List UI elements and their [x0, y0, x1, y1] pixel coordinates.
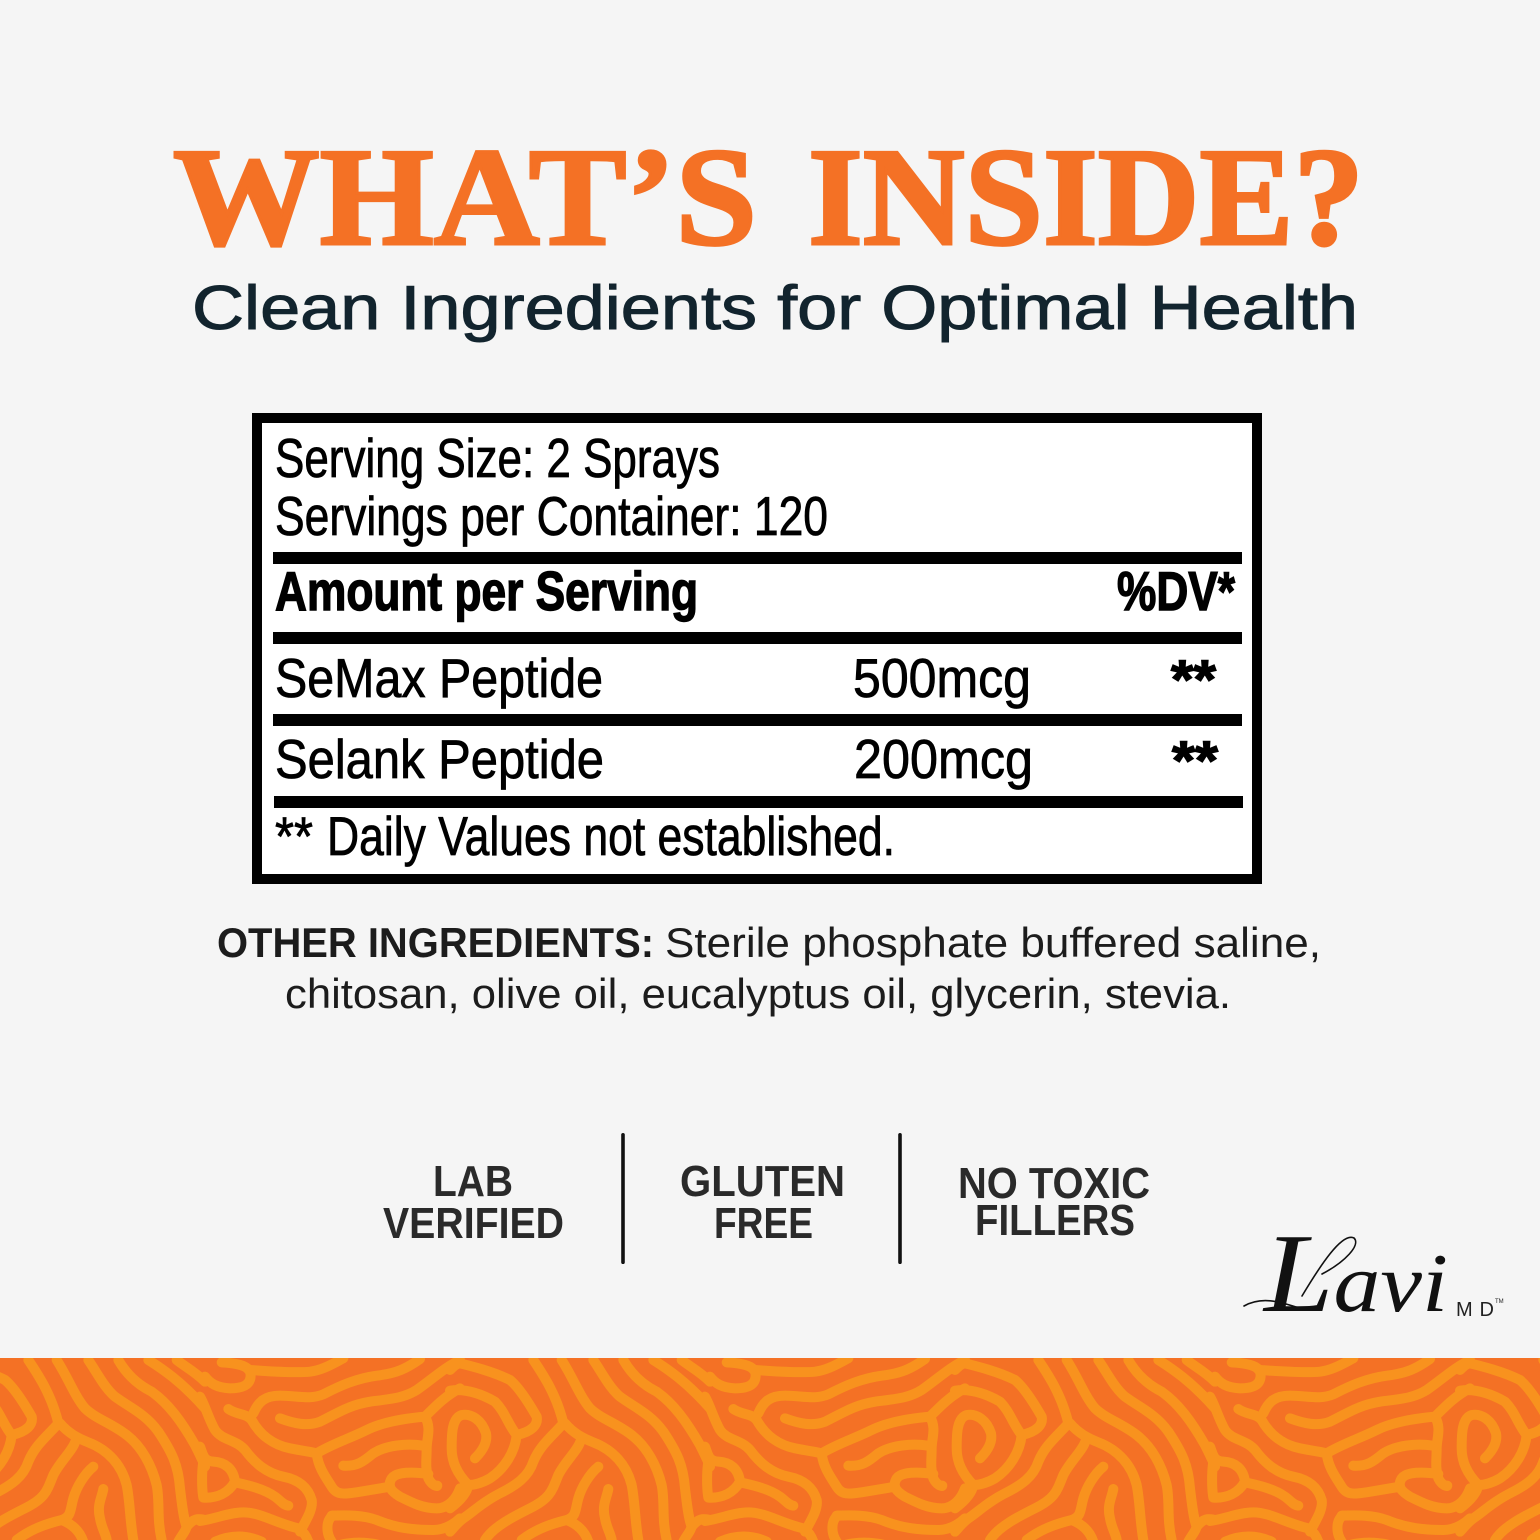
title: INSIDE? — [808, 120, 1364, 275]
row: Selank — [275, 728, 1219, 791]
badge: lab verified: VERIFIED — [383, 1199, 564, 1248]
logo: Lavi MD: TM — [1495, 1299, 1504, 1305]
amount per serving header: Amount per Serving — [275, 560, 698, 622]
badge: no toxic fillers — [958, 1159, 1150, 1245]
panel: supplement facts table — [257, 418, 1257, 879]
other ingredients text: OTHER INGREDIENTS: — [217, 919, 654, 966]
title — [173, 120, 1364, 275]
row: SeMax — [275, 647, 1217, 710]
other ingredients text — [217, 919, 1321, 1017]
serving size: Serving Size: 2 Sprays — [275, 427, 720, 489]
table frame — [257, 418, 1257, 879]
badge: no toxic fillers: NO TOXIC — [958, 1159, 1150, 1208]
row: Selank: Selank Peptide — [275, 728, 604, 790]
footnote: Daily Values not established. — [327, 805, 895, 867]
row: Selank: 200mcg — [854, 728, 1033, 790]
row: Selank: ** — [1172, 729, 1219, 791]
badge: gluten free: FREE — [714, 1199, 813, 1248]
logo: Lavi MD — [1244, 1212, 1504, 1336]
row: SeMax: 500mcg — [853, 647, 1031, 709]
badge: lab verified: LAB — [433, 1157, 513, 1206]
row: SeMax: ** — [1171, 648, 1217, 710]
badge: no toxic fillers: FILLERS — [975, 1196, 1135, 1245]
patterned orange footer band — [0, 1358, 1540, 1540]
subtitle: Clean Ingredients for Optimal Health — [192, 274, 1358, 343]
title: WHAT’S — [173, 120, 757, 275]
badge: gluten free — [680, 1157, 845, 1248]
other ingredients text: Sterile phosphate buffered saline, — [665, 919, 1321, 966]
badge: lab verified — [383, 1157, 564, 1248]
servings per container: Servings per Container: 120 — [275, 485, 828, 547]
footnote: ** — [275, 805, 313, 867]
other ingredients text: chitosan, olive oil, eucalyptus oil, glycerin, stevia. — [285, 970, 1231, 1017]
logo: Lavi MD: Lavi — [1262, 1212, 1448, 1336]
row: SeMax: SeMax Peptide — [275, 647, 603, 709]
percent daily value header: %DV* — [1117, 560, 1235, 622]
badge: gluten free: GLUTEN — [680, 1157, 845, 1206]
logo: Lavi MD: MD — [1456, 1299, 1494, 1321]
